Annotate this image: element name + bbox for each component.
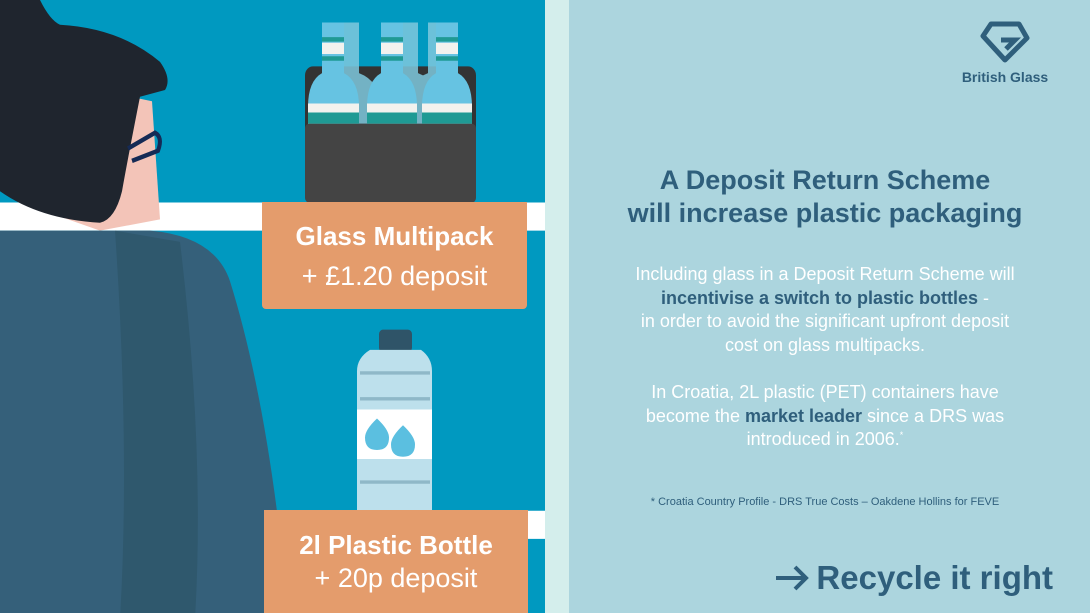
left illustration panel [0,0,545,613]
body text 2: In Croatia, 2L plastic (PET) containers have [651,382,999,402]
tagline: Recycle it right: Recycle it right [816,559,1053,596]
footnote: * Croatia Country Profile - DRS True Costs – Oakdene Hollins for FEVE [651,496,999,508]
body text 2 [646,382,1004,449]
body text 1: incentivise a switch to plastic bottles - [661,288,989,308]
label: plastic bottle: 2l Plastic Bottle [299,530,493,560]
label: glass multipack: Glass Multipack [296,221,493,251]
label: plastic bottle [264,510,528,613]
logo: British Glass [962,22,1048,85]
heading [628,165,1022,228]
label: glass multipack [262,202,527,309]
shelf 2 [500,511,545,539]
body text 1 [635,264,1015,355]
label: glass multipack: + £1.20 deposit [302,261,487,291]
heading: will increase plastic packaging [628,198,1022,228]
body text 2: introduced in 2006.* [747,429,903,449]
body text 1: cost on glass multipacks. [725,334,925,354]
shelf 1 [0,202,545,231]
multipack of glass bottles [305,22,476,202]
person [0,0,283,613]
plastic bottle [357,330,432,511]
logo: British Glass: British Glass [962,69,1048,85]
heading: A Deposit Return Scheme [660,165,990,195]
divider strip [545,0,569,613]
body text 2: become the market leader since a DRS was [646,406,1004,426]
body text 1: in order to avoid the significant upfront deposit [641,311,1009,331]
body text 1: Including glass in a Deposit Return Scheme will [635,264,1015,284]
label: plastic bottle: + 20p deposit [315,563,477,593]
